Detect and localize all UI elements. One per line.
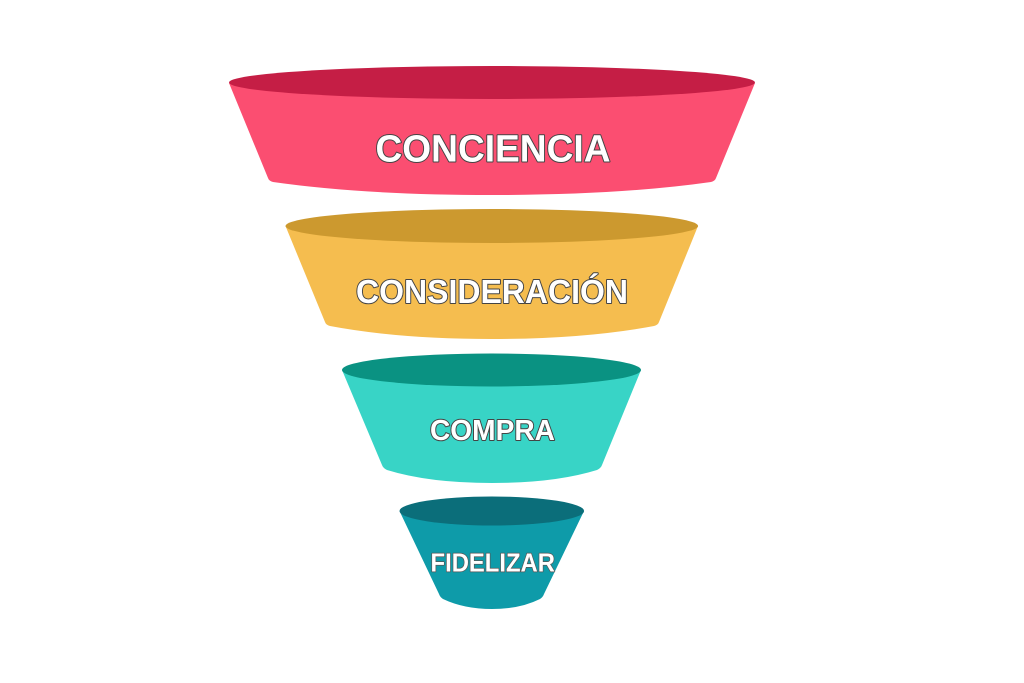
funnel tier 3: compra: [342, 354, 641, 483]
funnel tier 2: consideracion: CONSIDERACIÓN: [356, 273, 628, 310]
funnel tier 3: compra: COMPRA: [430, 415, 555, 447]
funnel tier 1: conciencia: [229, 66, 755, 195]
funnel tier 2: consideracion: [286, 209, 698, 339]
funnel tier 4: fidelizar: FIDELIZAR: [430, 548, 555, 578]
funnel tier 4: fidelizar: [400, 496, 584, 609]
funnel tier 1: conciencia: CONCIENCIA: [376, 128, 610, 170]
